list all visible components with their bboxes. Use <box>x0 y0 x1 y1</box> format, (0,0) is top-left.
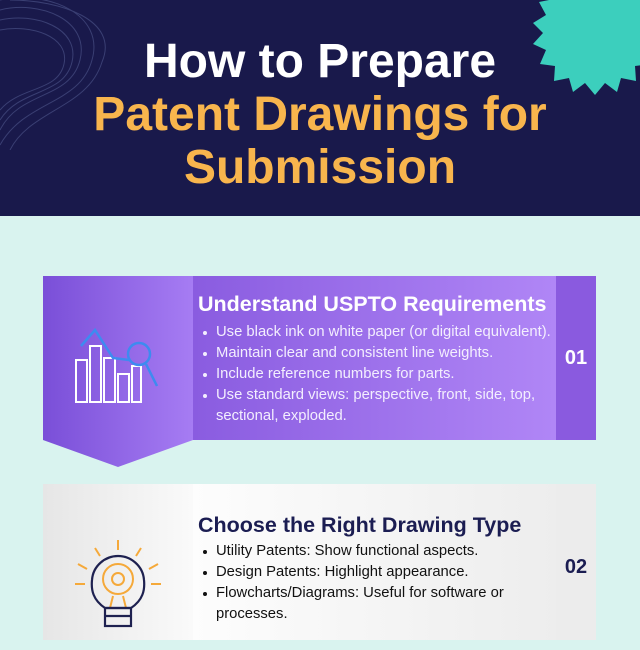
icon panel with chevron <box>43 276 193 467</box>
bullets: Utility Patents: Show functional aspects. <box>216 543 478 559</box>
title <box>93 35 547 194</box>
bullets <box>203 324 551 424</box>
text area <box>193 276 556 440</box>
header band <box>0 0 640 216</box>
number: 02 <box>565 556 587 578</box>
title: Submission <box>184 141 456 194</box>
bullets: Use standard views: perspective, front, side, top, sectional, exploded. <box>216 387 535 424</box>
title: How to Prepare <box>144 35 496 88</box>
bullets: Include reference numbers for parts. <box>216 366 455 382</box>
bullets <box>203 543 504 622</box>
title: Patent Drawings for <box>93 88 547 141</box>
bullets: Flowcharts/Diagrams: Useful for software or processes. <box>216 585 504 622</box>
number <box>556 484 596 640</box>
number: 01 <box>565 347 587 369</box>
bullets: Design Patents: Highlight appearance. <box>216 564 469 580</box>
panel: step 1 <box>43 276 596 467</box>
number <box>556 276 596 440</box>
teal starburst <box>533 0 640 95</box>
heading: Understand USPTO Requirements <box>198 292 546 316</box>
icon: light bulb <box>43 484 193 640</box>
bullets: Maintain clear and consistent line weights. <box>216 345 493 361</box>
bullets: Use black ink on white paper (or digital equivalent). <box>216 324 551 340</box>
text area <box>193 484 556 640</box>
heading: Choose the Right Drawing Type <box>198 513 521 537</box>
panel: step 2 <box>43 484 596 640</box>
